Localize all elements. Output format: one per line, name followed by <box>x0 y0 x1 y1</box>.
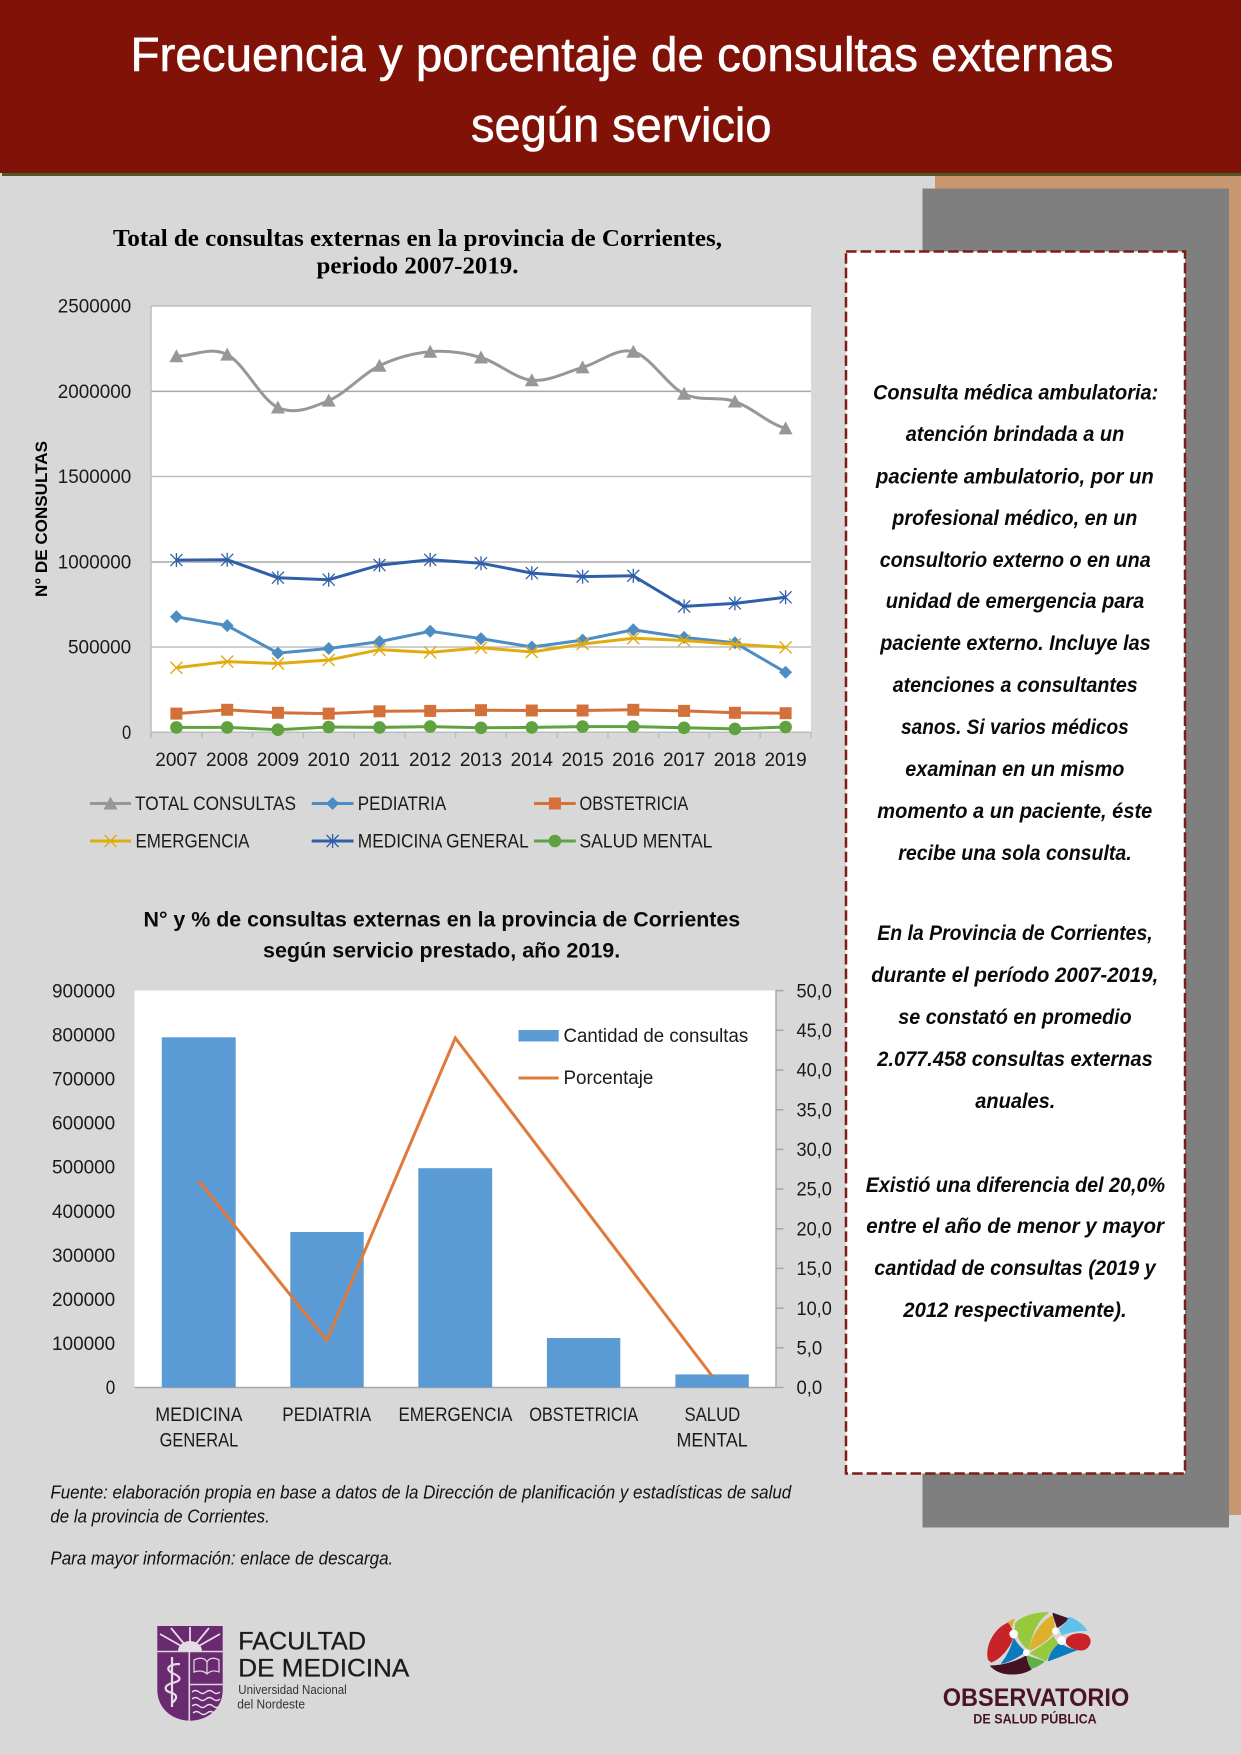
series: salud mental <box>176 727 786 730</box>
decorative tan panel <box>935 176 1241 1515</box>
logo wordmark: OBSERVATORIO <box>943 1684 1129 1712</box>
text block: promedio: durante el período 2007-2019, <box>871 964 1158 987</box>
text block: diferencia: Existió una diferencia del 20,0% <box>866 1174 1165 1197</box>
category labels: OBSTETRICIA <box>529 1405 638 1426</box>
left axis labels: 200000 <box>52 1290 115 1311</box>
right axis labels: 50,0 <box>796 981 832 1002</box>
y axis labels: 0 <box>122 723 131 744</box>
series: pediatria <box>176 617 786 672</box>
x axis labels: 2007 <box>155 750 198 771</box>
series: medicina general <box>176 560 786 606</box>
line chart: total de consultas 2007-2019 <box>33 297 811 771</box>
text block: definición: Consulta médica ambulatoria: <box>873 381 1158 404</box>
series: total consultas <box>176 351 786 428</box>
text block: definición: consultorio externo o en una <box>880 549 1151 572</box>
right axis labels: 20,0 <box>796 1219 832 1240</box>
y axis title: N° DE CONSULTAS <box>33 441 51 597</box>
text block: definición: sanos. Si varios médicos <box>901 716 1129 739</box>
x axis labels: 2009 <box>257 750 299 771</box>
x axis labels: 2016 <box>612 750 654 771</box>
text block: diferencia: 2012 respectivamente). <box>902 1299 1127 1322</box>
left axis labels: 600000 <box>52 1114 115 1135</box>
y axis labels <box>58 297 131 744</box>
icon: brain <box>988 1613 1090 1674</box>
right axis labels: 45,0 <box>796 1021 832 1042</box>
text block: definición: unidad de emergencia para <box>886 590 1145 613</box>
combo chart legend: Cantidad de consultas <box>564 1026 748 1047</box>
right axis labels: 30,0 <box>796 1140 832 1161</box>
category labels: GENERAL <box>160 1430 238 1451</box>
category labels: EMERGENCIA <box>398 1405 513 1426</box>
category labels: SALUD <box>684 1405 740 1426</box>
logo: Facultad de Medicina <box>157 1626 410 1721</box>
logo wordmark: FACULTAD <box>238 1627 366 1655</box>
logo wordmark <box>943 1684 1129 1726</box>
text block: promedio: se constató en promedio <box>898 1006 1132 1029</box>
right axis labels: 25,0 <box>796 1180 832 1201</box>
x axis labels: 2012 <box>409 750 451 771</box>
text block: definición <box>873 381 1158 865</box>
left axis labels: 0 <box>106 1378 115 1399</box>
logo wordmark: DE SALUD PÚBLICA <box>973 1709 1097 1726</box>
line chart legend: MEDICINA GENERAL <box>358 832 529 852</box>
x axis labels: 2008 <box>206 750 248 771</box>
logo: Observatorio de Salud Pública <box>943 1613 1129 1726</box>
category labels: PEDIATRIA <box>282 1405 372 1426</box>
left axis labels <box>52 981 115 1399</box>
left axis labels: 900000 <box>52 981 115 1002</box>
text block: definición: profesional médico, en un <box>891 507 1137 530</box>
bar chart heading: según servicio prestado, año 2019. <box>263 939 620 963</box>
series: emergencia <box>176 638 786 668</box>
x axis labels: 2011 <box>359 750 400 771</box>
header banner <box>0 0 1241 176</box>
left axis labels: 400000 <box>52 1202 115 1223</box>
line chart legend: PEDIATRIA <box>358 794 446 815</box>
text block: definición: atención brindada a un <box>906 423 1124 446</box>
text block: definición: paciente ambulatorio, por un <box>875 465 1154 488</box>
right axis labels: 35,0 <box>796 1100 832 1121</box>
percentage line <box>199 1038 712 1376</box>
y axis labels: 2000000 <box>58 382 131 403</box>
text block: promedio: anuales. <box>975 1090 1055 1113</box>
line chart legend: OBSTETRICIA <box>580 794 689 815</box>
source notes <box>50 1482 792 1568</box>
text block: promedio <box>871 922 1158 1113</box>
text block: promedio: En la Provincia de Corrientes, <box>877 922 1153 945</box>
title: según servicio <box>471 100 772 152</box>
bar chart heading <box>144 908 740 963</box>
text block: diferencia: entre el año de menor y mayor <box>866 1215 1166 1238</box>
text block: promedio: 2.077.458 consultas externas <box>876 1048 1153 1071</box>
text block: definición: atenciones a consultantes <box>893 674 1138 697</box>
x axis labels: 2019 <box>764 750 807 771</box>
left axis labels: 300000 <box>52 1246 115 1267</box>
line chart heading: periodo 2007-2019. <box>316 254 518 280</box>
x axis labels: 2010 <box>308 750 350 771</box>
x axis labels <box>155 750 807 771</box>
category labels <box>155 1405 748 1451</box>
x axis labels: 2014 <box>511 750 553 771</box>
right axis labels <box>796 981 832 1399</box>
category labels: MENTAL <box>676 1430 748 1451</box>
source notes: de la provincia de Corrientes. <box>50 1507 270 1527</box>
line chart heading: Total de consultas externas en la provincia de Corrientes, <box>113 226 722 252</box>
y axis labels: 1500000 <box>58 467 131 488</box>
line chart legend: SALUD MENTAL <box>580 832 712 852</box>
text block: diferencia <box>866 1174 1166 1322</box>
logo wordmark: Universidad Nacional <box>238 1682 347 1697</box>
right axis labels: 40,0 <box>796 1061 832 1082</box>
bar chart heading: N° y % de consultas externas en la provincia de Corrientes <box>144 908 740 932</box>
line chart legend: TOTAL CONSULTAS <box>135 794 296 815</box>
text block: diferencia: cantidad de consultas (2019 y <box>874 1257 1157 1280</box>
series: obstetricia <box>176 710 786 714</box>
right axis labels: 15,0 <box>796 1259 832 1280</box>
source notes: Fuente: elaboración propia en base a datos de la Dirección de planificación y estadísticas de salud <box>50 1482 792 1502</box>
category labels: MEDICINA <box>155 1405 243 1426</box>
bars <box>162 1037 749 1388</box>
title: Frecuencia y porcentaje de consultas externas <box>130 29 1114 82</box>
icon: shield <box>157 1626 223 1721</box>
right axis labels: 0,0 <box>796 1378 822 1399</box>
source notes: Para mayor información: enlace de descarga. <box>50 1548 393 1568</box>
combo chart legend: Porcentaje <box>564 1068 653 1089</box>
y axis labels: 500000 <box>68 638 131 659</box>
x axis labels: 2017 <box>663 750 705 771</box>
panel: definición consulta médica <box>846 252 1185 1474</box>
left axis labels: 500000 <box>52 1158 115 1179</box>
text block: definición: momento a un paciente, éste <box>877 800 1153 823</box>
text block: definición: recibe una sola consulta. <box>898 842 1132 865</box>
decorative gray panel <box>922 188 1229 1528</box>
y axis labels: 1000000 <box>58 553 131 574</box>
line chart legend: EMERGENCIA <box>136 832 250 852</box>
line chart heading <box>113 226 722 280</box>
right axis labels: 5,0 <box>796 1338 822 1360</box>
logo wordmark: DE MEDICINA <box>238 1655 410 1683</box>
logo wordmark <box>237 1627 410 1711</box>
left axis labels: 800000 <box>52 1025 115 1046</box>
x axis labels: 2015 <box>561 750 604 771</box>
left axis labels: 100000 <box>52 1334 115 1355</box>
line chart legend <box>90 794 712 852</box>
left axis labels: 700000 <box>52 1070 115 1090</box>
y axis labels: 2500000 <box>58 297 131 318</box>
text block: definición: examinan en un mismo <box>905 758 1124 781</box>
x axis labels: 2013 <box>460 750 502 771</box>
combo chart legend <box>518 1026 748 1089</box>
combo chart: consultas y porcentaje 2019 <box>52 981 832 1451</box>
text block: definición: paciente externo. Incluye las <box>879 632 1151 655</box>
right axis labels: 10,0 <box>796 1299 832 1320</box>
logo wordmark: del Nordeste <box>237 1696 305 1711</box>
title <box>130 29 1114 152</box>
x axis labels: 2018 <box>714 750 756 771</box>
